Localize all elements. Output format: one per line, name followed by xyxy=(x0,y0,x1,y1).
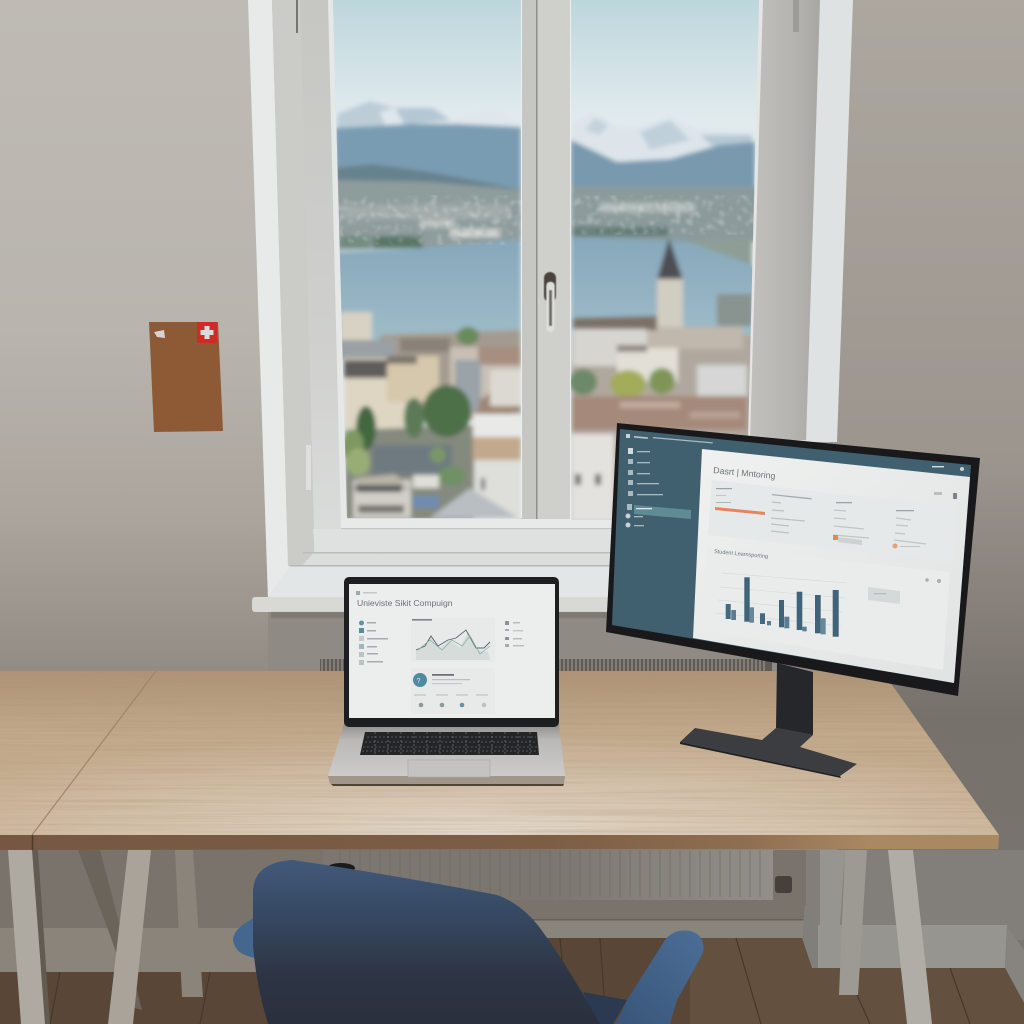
desk xyxy=(0,671,1024,850)
desk front edge xyxy=(0,835,999,850)
line chart xyxy=(411,618,495,662)
top card xyxy=(708,480,957,562)
info card: ? xyxy=(416,678,420,685)
orange progress bar xyxy=(715,507,765,515)
seat behind xyxy=(583,992,627,1024)
snowy mountains xyxy=(335,100,752,165)
monitor sidebar panel xyxy=(612,429,971,683)
left armrest xyxy=(233,917,256,958)
chair xyxy=(233,860,703,1024)
stand base xyxy=(680,728,857,776)
monitor top bar text xyxy=(626,434,964,471)
right list xyxy=(505,621,524,647)
active menu item xyxy=(634,505,691,519)
icon: red Swiss flag xyxy=(197,322,217,343)
laptop heading: Unieviste Sikit Compuign xyxy=(357,598,453,608)
baseboard right xyxy=(802,905,1007,968)
monitor stand xyxy=(680,663,857,778)
stand neck xyxy=(776,663,813,735)
baseboard left xyxy=(0,928,300,972)
laptop lid xyxy=(344,577,559,727)
lake xyxy=(335,239,521,345)
radiator xyxy=(323,850,792,900)
window frame xyxy=(272,0,820,566)
chair back xyxy=(253,860,600,1024)
window handle xyxy=(544,272,556,332)
monitor white content xyxy=(693,449,970,683)
monitor sidebar menu xyxy=(626,448,691,528)
right armrest xyxy=(615,930,703,1024)
bars xyxy=(726,577,839,637)
foreground city right with church tower xyxy=(569,238,761,525)
blue mountains xyxy=(335,124,755,192)
chair headrest shadow xyxy=(327,863,355,873)
desk legs xyxy=(8,850,932,1024)
info card xyxy=(411,668,495,714)
legend box xyxy=(868,587,900,604)
icon: white pin xyxy=(154,330,165,338)
sidebar list xyxy=(359,620,388,665)
radiator valve xyxy=(775,876,792,893)
trackpad xyxy=(408,760,490,777)
baseboard niche xyxy=(290,920,806,938)
keyboard xyxy=(360,732,539,755)
window view xyxy=(330,0,762,530)
far city xyxy=(335,180,761,268)
near hill xyxy=(338,163,510,190)
foreground city left xyxy=(335,312,521,520)
radiator grille xyxy=(320,659,772,671)
city texture xyxy=(339,195,754,245)
wall below desk xyxy=(0,850,1024,1003)
laptop screen xyxy=(349,584,555,718)
laptop xyxy=(328,577,565,786)
wood grain xyxy=(0,748,999,835)
corkboard xyxy=(149,322,223,432)
wood floor xyxy=(0,938,1024,1024)
window reveal xyxy=(248,0,853,600)
monitor xyxy=(606,423,980,696)
bottom card with bar chart xyxy=(700,547,950,670)
laptop base xyxy=(328,724,565,786)
window sill xyxy=(252,565,610,618)
chart heading: Student Learnsporting xyxy=(714,549,768,560)
monitor heading: Dasrt | Mntoring xyxy=(713,465,776,481)
